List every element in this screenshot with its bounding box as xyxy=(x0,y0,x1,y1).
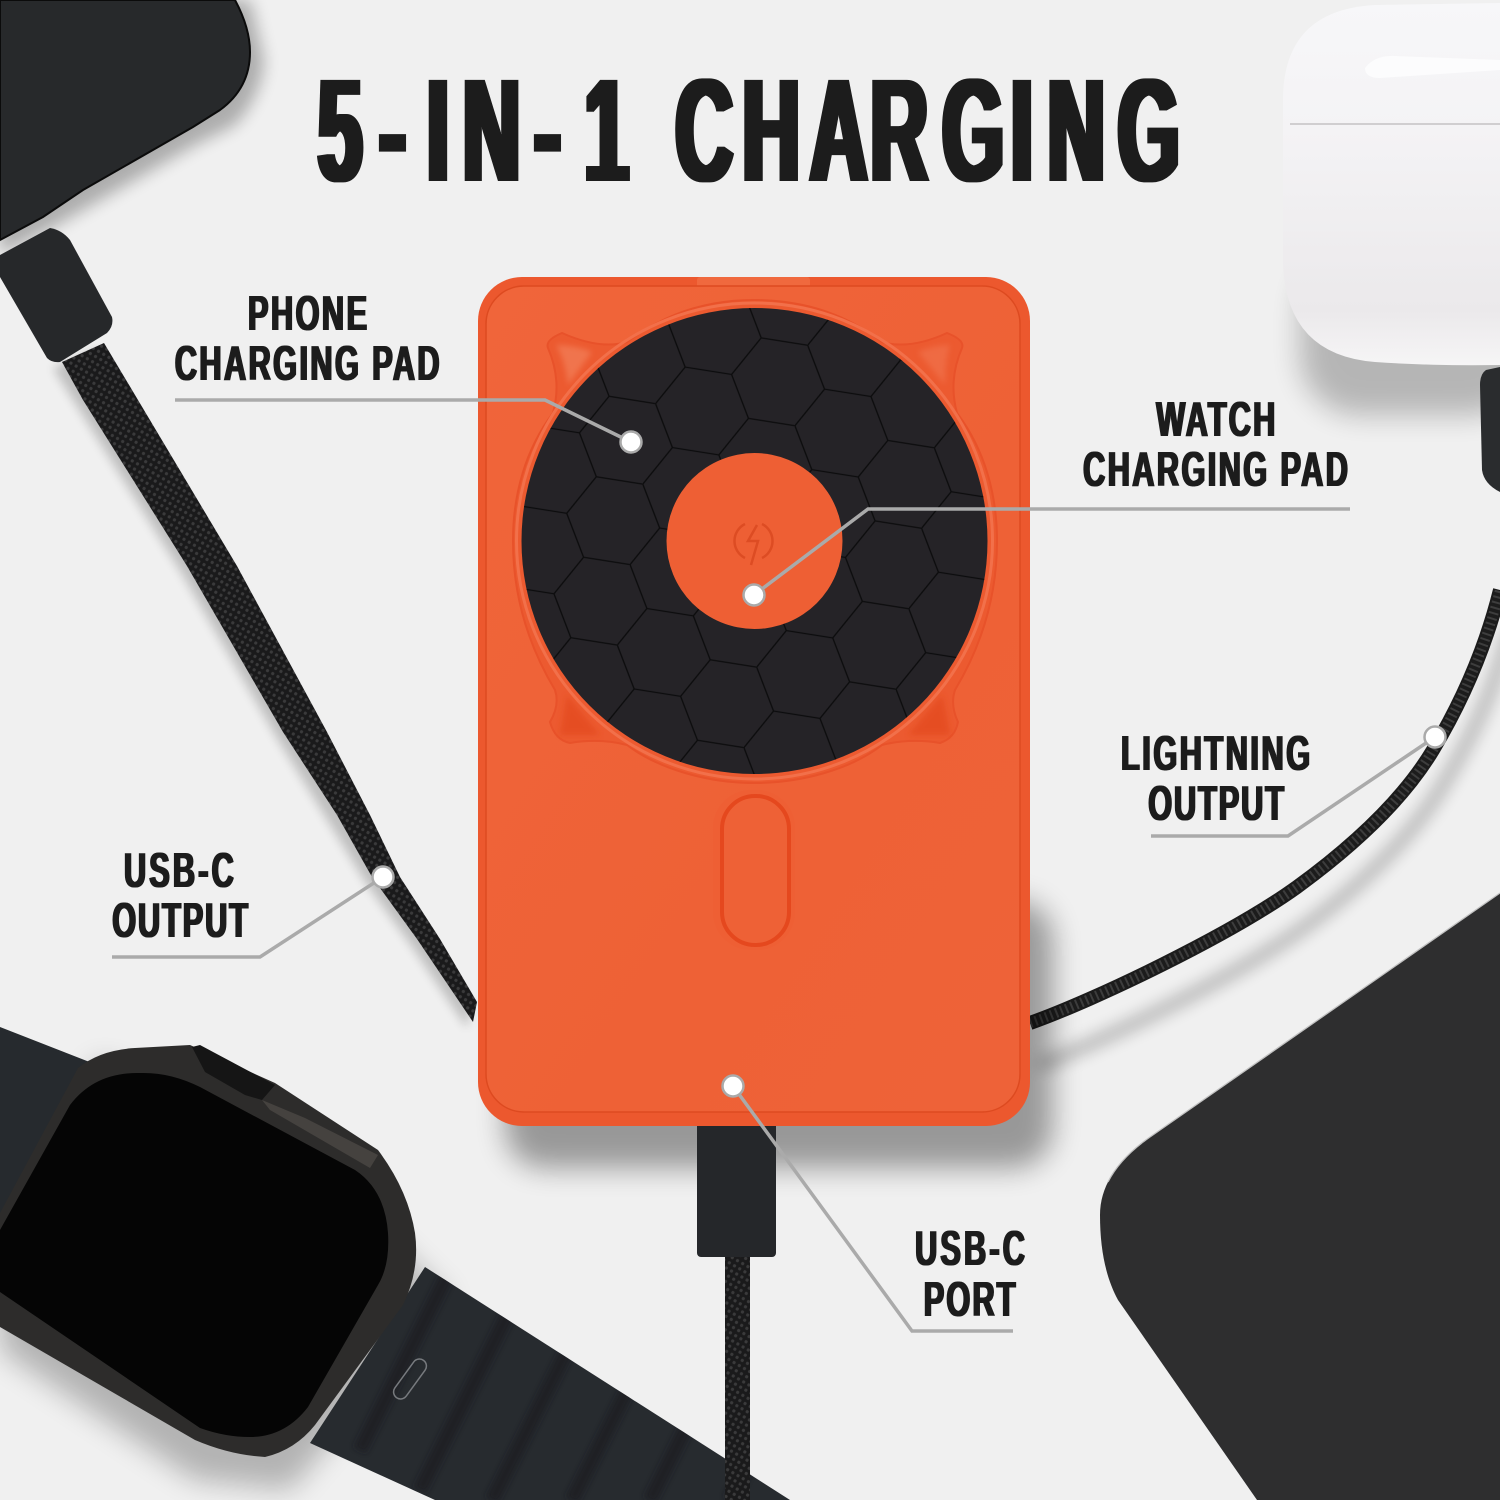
phone charging pad xyxy=(522,308,988,774)
power button xyxy=(713,790,795,950)
power bank shadow xyxy=(505,900,1053,1168)
watch charging pad xyxy=(666,453,842,629)
callout: USB-C output: USB-C xyxy=(124,843,234,898)
callout: watch charging pad: CHARGING PAD xyxy=(1083,442,1348,497)
USB-C output connector xyxy=(0,228,112,362)
callout: USB-C port: USB-C xyxy=(915,1221,1025,1276)
watch band xyxy=(0,1027,790,1500)
smartwatch xyxy=(0,1027,790,1500)
callout: phone charging pad xyxy=(175,286,642,452)
power bank xyxy=(478,277,1030,1126)
callout: USB-C output xyxy=(112,843,394,957)
callout: phone charging pad: PHONE xyxy=(248,286,367,341)
watch case xyxy=(0,1045,416,1457)
phone top-left xyxy=(0,0,264,255)
callout: USB-C port xyxy=(722,1076,1025,1331)
callout: USB-C port: PORT xyxy=(924,1272,1016,1327)
watch crown xyxy=(192,1045,275,1100)
callout: USB-C output: OUTPUT xyxy=(112,893,248,948)
disc surround xyxy=(513,300,997,783)
title: 5-IN-1 CHARGING xyxy=(318,49,1180,213)
callout: lightning output: LIGHTNING xyxy=(1121,726,1310,781)
callout: lightning output xyxy=(1121,726,1446,836)
lightning output cable xyxy=(1030,590,1500,1065)
callout: watch charging pad: WATCH xyxy=(1156,392,1275,447)
icon: charge symbol xyxy=(734,524,773,565)
callout: lightning output: OUTPUT xyxy=(1148,776,1284,831)
power bank on bottom right xyxy=(1100,893,1500,1500)
watch screen xyxy=(0,1073,388,1437)
lightning connector xyxy=(1480,367,1500,492)
callout: watch charging pad xyxy=(744,392,1350,606)
watch side button xyxy=(262,1100,378,1168)
USB-C output cable xyxy=(0,228,477,1028)
airpods case xyxy=(1283,3,1500,492)
callout: phone charging pad: CHARGING PAD xyxy=(175,336,440,391)
body xyxy=(478,277,1030,1126)
USB-C port cable xyxy=(697,1122,776,1500)
